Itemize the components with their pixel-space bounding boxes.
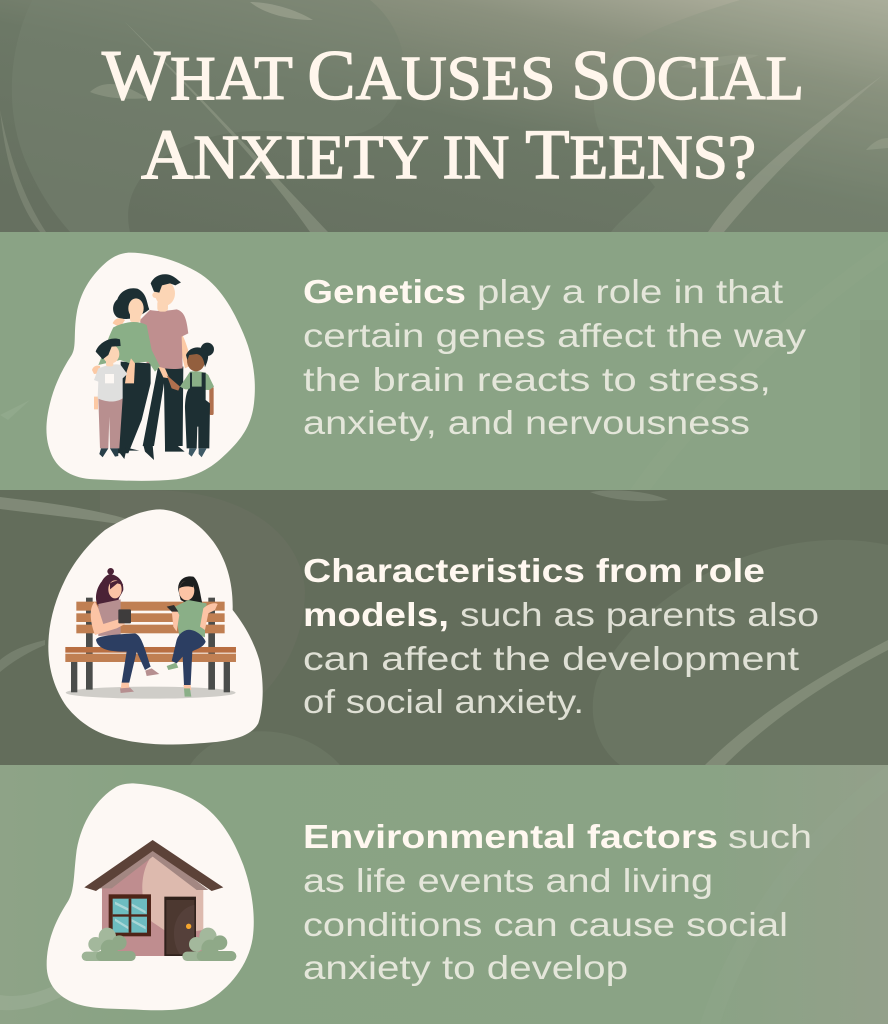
text: genetics: the brain reacts to stress,	[303, 361, 771, 398]
band 2 background	[0, 490, 888, 765]
bush right	[182, 928, 236, 961]
title: ANXIETY IN TEENS?	[141, 116, 756, 194]
text: genetics: play a role in that	[477, 273, 783, 310]
text: role models: can affect the development	[303, 640, 799, 677]
band 3 background	[0, 765, 888, 1024]
text: role models: such as parents also	[460, 596, 819, 633]
text: environmental factors: anxiety to develop	[303, 949, 628, 986]
text: role models: models,	[303, 596, 449, 633]
girl	[167, 375, 180, 391]
title: WHAT CAUSES SOCIAL	[102, 37, 804, 115]
dad	[181, 333, 192, 368]
panel: genetics	[46, 253, 807, 481]
panel: role models	[48, 509, 819, 745]
boy	[92, 366, 101, 409]
text: environmental factors: conditions can cause social	[303, 906, 788, 943]
text: genetics: certain genes affect the way	[303, 317, 807, 354]
woman right	[178, 576, 203, 607]
icon: house illustration	[47, 783, 254, 1010]
title	[102, 37, 804, 194]
mom	[113, 288, 149, 319]
panel: environmental factors	[47, 783, 812, 1010]
text: role models: of social anxiety.	[303, 683, 584, 720]
text: genetics	[303, 273, 807, 441]
text: genetics: anxiety, and nervousness	[303, 404, 750, 441]
text: environmental factors: such	[728, 818, 812, 855]
band 1 background	[0, 232, 888, 490]
text: role models	[303, 552, 819, 720]
text: genetics: Genetics	[303, 273, 466, 310]
icon: two women on a bench	[48, 509, 263, 745]
bush left	[82, 928, 136, 961]
icon: family illustration	[46, 253, 255, 481]
text: environmental factors	[303, 818, 812, 986]
header background	[0, 0, 888, 232]
text: environmental factors: as life events and living	[303, 862, 713, 899]
woman left	[107, 568, 114, 575]
text: role models: Characteristics from role	[303, 552, 765, 589]
text: environmental factors: Environmental factors	[303, 818, 718, 855]
